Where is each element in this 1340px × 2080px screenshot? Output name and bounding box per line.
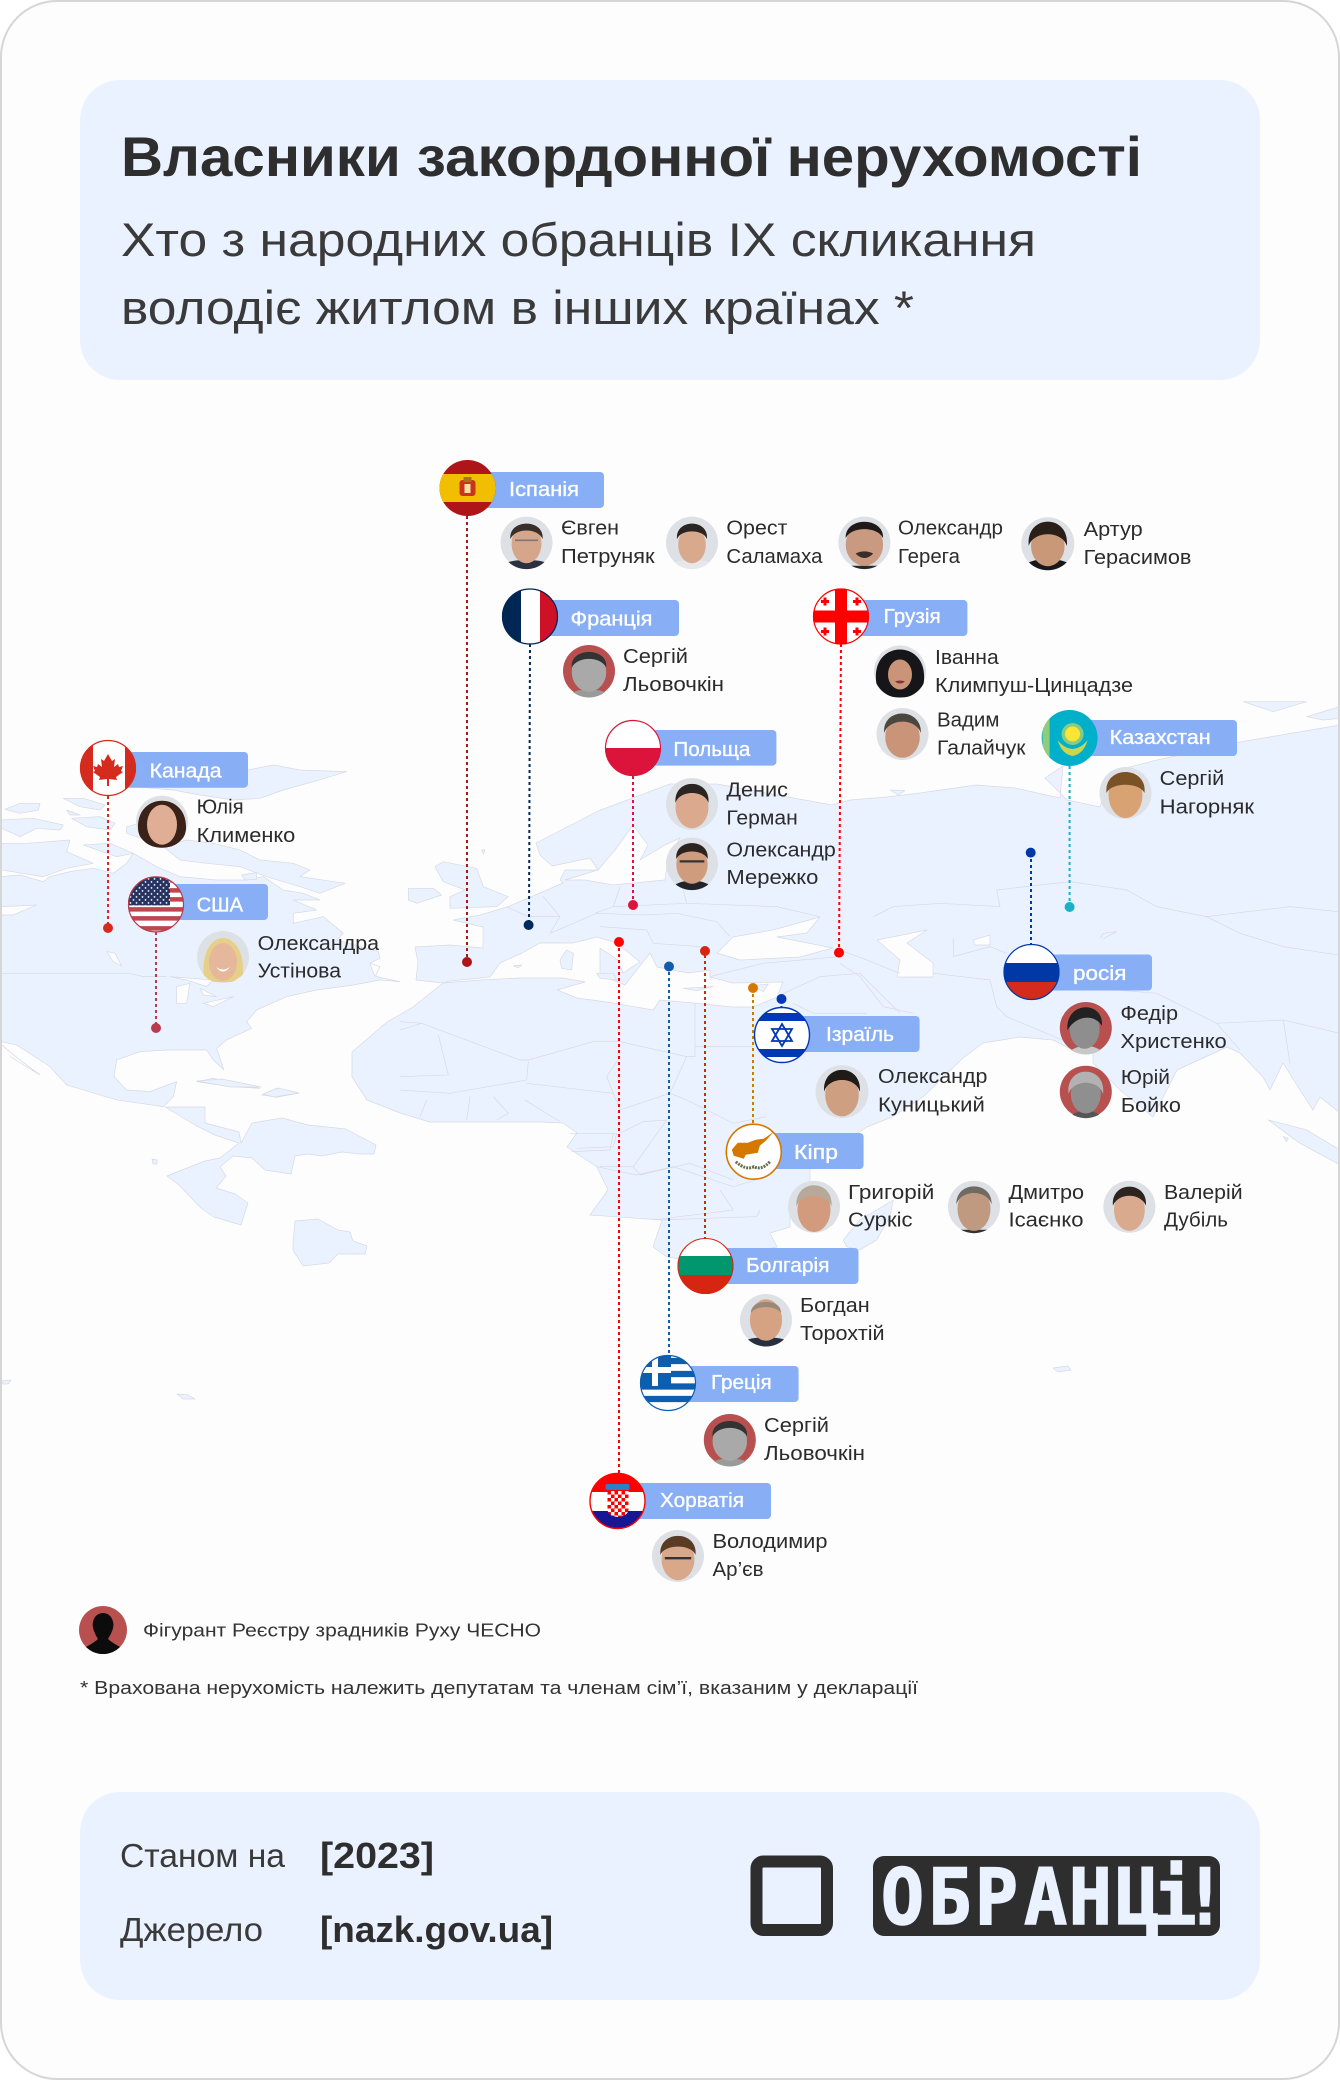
name <box>726 778 798 830</box>
flag: USA <box>128 876 184 932</box>
name: Христенко <box>1120 1030 1227 1053</box>
name <box>197 795 295 847</box>
marker: Польща: Польща <box>673 739 751 761</box>
name <box>800 1294 885 1345</box>
person: Євген Петруняк <box>500 516 656 573</box>
portrait <box>1021 517 1075 574</box>
name: Юлія <box>197 795 244 818</box>
person: Олександр Мережко <box>666 838 836 893</box>
Britain and Ireland <box>400 850 900 1220</box>
flag: russia <box>1004 944 1060 1000</box>
logo: wordmark: ОБРАНЦі! <box>881 1851 1227 1943</box>
flag: Kazakhstan <box>1042 710 1098 766</box>
name: Денис <box>726 778 788 801</box>
name: Володимир <box>712 1530 828 1553</box>
name <box>1008 1181 1084 1232</box>
Black Sea <box>717 917 833 960</box>
portrait <box>666 838 718 893</box>
name <box>726 516 823 568</box>
marker: Болгарія: Болгарія <box>746 1255 829 1277</box>
footnote: * Врахована нерухомість належить депутатам та членам сім’ї, вказаним у декларації <box>80 1677 918 1698</box>
name <box>898 516 1003 568</box>
name: Саламаха <box>726 545 823 568</box>
marker: Болгарія <box>678 946 858 1294</box>
Madagascar <box>570 1133 893 1250</box>
person: Сергій Льовочкін (Греція) <box>704 1414 865 1470</box>
flag: Greece <box>640 1355 696 1411</box>
person: Юлія Клименко <box>136 795 295 848</box>
marker: Грузія: Грузія <box>884 606 941 628</box>
name <box>623 645 724 696</box>
name: Нагорняк <box>1160 796 1255 818</box>
Far south islands <box>1053 1366 1071 1372</box>
flag: Cyprus <box>726 1124 781 1179</box>
Eurasia and Africa landmass <box>352 725 1340 1262</box>
marker: Ізраїль <box>754 994 920 1063</box>
portrait <box>563 645 615 701</box>
marker: Греція <box>640 962 799 1411</box>
Aral Sea <box>973 935 990 945</box>
marker: Кіпр <box>726 983 864 1179</box>
name <box>1120 1002 1227 1053</box>
marker: Канада <box>80 740 248 933</box>
person: Юрій Бойко <box>1060 1066 1181 1122</box>
name: Іванна <box>935 646 999 669</box>
title: Власники закордонної нерухомості <box>121 125 1142 188</box>
flag: Croatia <box>590 1473 646 1529</box>
flag: France <box>502 588 558 644</box>
name: Юрій <box>1121 1066 1170 1089</box>
portrait <box>1100 767 1152 819</box>
Mediterranean sea <box>443 937 783 1010</box>
portrait <box>652 1530 704 1582</box>
name: Олександр <box>898 516 1003 540</box>
name <box>764 1414 865 1465</box>
marker: Польща <box>605 720 776 910</box>
marker: Ізраїль: Ізраїль <box>826 1024 894 1046</box>
portrait <box>197 931 249 983</box>
name: Герасимов <box>1084 546 1191 569</box>
person: Іванна Климпуш-Цинцадзе <box>874 646 1133 698</box>
portrait <box>500 517 552 573</box>
name: Льовочкін <box>623 673 724 696</box>
Caspian Sea <box>877 930 933 977</box>
source label: Джерело <box>120 1911 263 1948</box>
person: Олександр Герега <box>838 516 1003 571</box>
footer panel <box>80 1792 1260 2000</box>
name: Валерій <box>1164 1181 1243 1204</box>
person: Федір Христенко <box>1060 1002 1227 1058</box>
name <box>561 516 656 568</box>
subtitle line 1: Хто з народних обранців ІХ скликання <box>121 213 1036 266</box>
name: Климпуш-Цинцадзе <box>935 674 1133 697</box>
marker: росія <box>1004 848 1152 1000</box>
name: Сергій <box>1160 767 1224 790</box>
marker: Греція: Греція <box>711 1372 772 1394</box>
name: Олександр <box>878 1065 987 1088</box>
marker: Канада: Канада <box>150 760 223 782</box>
name: Дмитро <box>1008 1181 1084 1204</box>
flag: Spain <box>440 460 496 516</box>
name: Артур <box>1084 518 1143 541</box>
South America <box>165 1107 376 1225</box>
name <box>937 708 1027 760</box>
portrait <box>815 1065 869 1119</box>
portrait <box>136 796 188 848</box>
name: Клименко <box>197 824 295 847</box>
portrait <box>1060 1066 1112 1122</box>
portrait <box>948 1181 1000 1235</box>
world map <box>2 702 1340 1399</box>
date value: [2023] <box>320 1835 434 1876</box>
name <box>1084 518 1191 569</box>
person: Денис Герман <box>666 778 798 830</box>
name: Богдан <box>800 1294 870 1317</box>
name: Мережко <box>726 866 818 889</box>
name: Григорій <box>848 1181 934 1204</box>
person: Сергій Нагорняк <box>1100 767 1255 819</box>
marker: Казахстан <box>1042 710 1237 912</box>
name: Устінова <box>258 960 342 982</box>
person: Олександра Устінова <box>197 931 380 983</box>
portrait <box>876 708 928 760</box>
name: Олександра <box>258 932 380 955</box>
island south of South America <box>293 1219 367 1266</box>
marker: Іспанія: Іспанія <box>509 479 579 501</box>
name <box>1121 1066 1181 1117</box>
name: Герега <box>898 545 961 568</box>
legend: traitors registry <box>79 1606 541 1654</box>
person: Вадим Галайчук <box>876 708 1027 760</box>
name: Торохтій <box>800 1322 885 1345</box>
name: Орест <box>726 516 788 540</box>
flag: Israel <box>754 1007 810 1063</box>
name: Олександр <box>726 838 836 862</box>
portrait <box>788 1181 840 1233</box>
logo: square <box>756 1862 827 1930</box>
name <box>1160 767 1255 818</box>
name: Євген <box>561 516 619 540</box>
marker: Кіпр: Кіпр <box>794 1142 838 1164</box>
marker: Франція <box>502 588 679 930</box>
name: Дубіль <box>1164 1209 1228 1232</box>
name: Герман <box>726 806 798 830</box>
North and Central America <box>2 765 400 1107</box>
name <box>878 1065 987 1116</box>
portrait <box>666 778 718 830</box>
name: Куницький <box>878 1094 985 1116</box>
name: Суркіс <box>848 1209 912 1232</box>
marker: Франція: Франція <box>570 608 652 630</box>
Caribbean islands <box>197 1079 261 1087</box>
name: Федір <box>1120 1002 1178 1025</box>
name <box>935 646 1133 697</box>
header panel <box>80 80 1260 380</box>
flag: Canada <box>80 740 136 796</box>
name: Сергій <box>764 1414 829 1437</box>
portrait <box>740 1294 792 1350</box>
flag: Georgia <box>813 588 869 644</box>
person: Олександр Куницький <box>815 1065 987 1119</box>
name <box>1164 1181 1243 1232</box>
Baltic Sea <box>565 825 680 885</box>
person: Валерій Дубіль <box>1103 1181 1243 1233</box>
name <box>726 838 836 889</box>
person: Артур Герасимов <box>1021 517 1191 574</box>
date label: Станом на <box>120 1837 286 1874</box>
name <box>712 1530 828 1581</box>
marker: Хорватія <box>590 937 771 1529</box>
marker: США <box>128 876 268 1033</box>
legend text: Фігурант Реєстру зрадників Руху ЧЕСНО <box>143 1620 541 1640</box>
person: Богдан Торохтій <box>740 1294 885 1350</box>
name: Вадим <box>937 708 999 732</box>
name: Галайчук <box>937 736 1027 760</box>
portrait <box>666 517 718 573</box>
portrait <box>1103 1181 1155 1233</box>
portrait <box>838 517 890 571</box>
portrait <box>704 1414 756 1470</box>
name <box>258 932 380 982</box>
flag: Poland <box>605 720 661 776</box>
person: Сергій Льовочкін (Франція) <box>563 645 724 701</box>
flag: Bulgaria <box>678 1238 734 1294</box>
portrait <box>874 646 926 698</box>
marker: Грузія <box>813 588 967 958</box>
name: Бойко <box>1121 1094 1181 1117</box>
marker: Казахстан: Казахстан <box>1110 727 1211 749</box>
legend icon <box>79 1606 127 1654</box>
name <box>848 1181 934 1232</box>
source value: [nazk.gov.ua] <box>320 1909 553 1950</box>
marker: Хорватія: Хорватія <box>660 1490 744 1512</box>
person: Григорій Суркіс <box>788 1181 934 1233</box>
name: Ісаєнко <box>1008 1209 1084 1232</box>
name: Льовочкін <box>764 1442 865 1465</box>
person: Орест Саламаха <box>666 516 823 573</box>
name: Петруняк <box>561 545 656 568</box>
subtitle line 2: володіє житлом в інших країнах * <box>121 281 914 334</box>
Asian borders and northern islands <box>840 702 1340 1165</box>
marker: Іспанія <box>440 460 604 967</box>
marker: росія: росія <box>1073 963 1126 985</box>
name: Сергій <box>623 645 688 668</box>
portrait <box>1060 1002 1112 1058</box>
marker: США: США <box>197 894 244 916</box>
person: Дмитро Ісаєнко <box>948 1181 1084 1235</box>
name: Ар’єв <box>712 1558 764 1581</box>
person: Володимир Ар’єв <box>652 1530 828 1582</box>
